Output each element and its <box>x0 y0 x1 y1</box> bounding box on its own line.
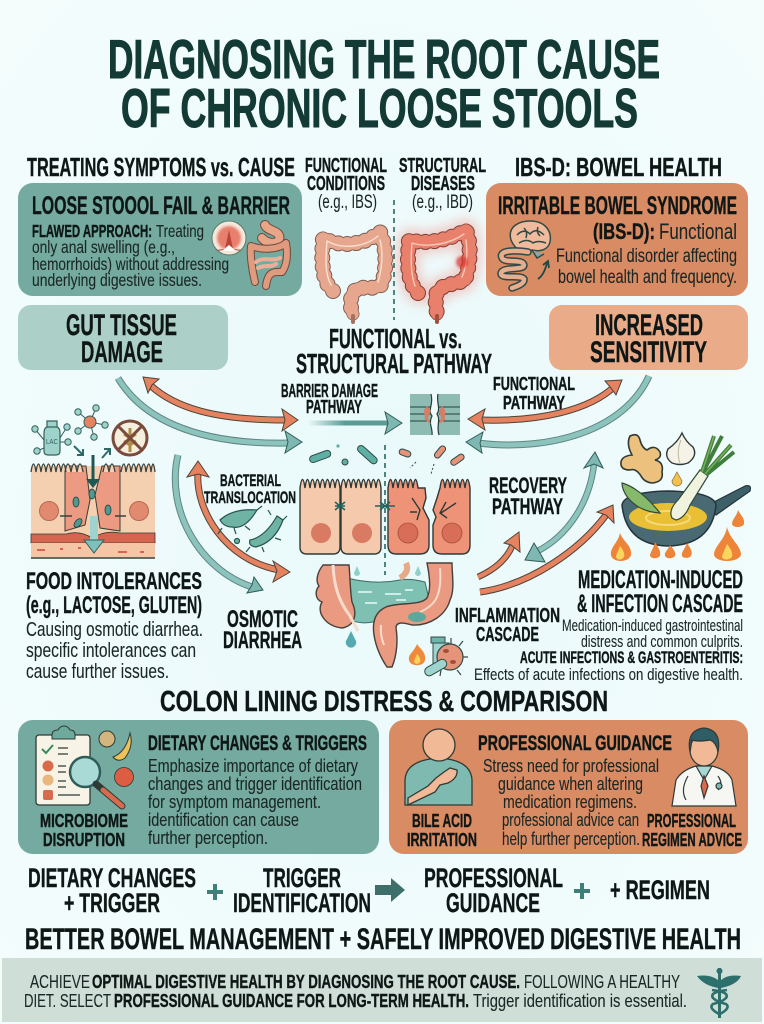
panel: dietary changes and triggers: DIETARY CHANGES & TRIGGERS <box>148 732 367 755</box>
label: bacterial translocation: TRANSLOCATION <box>204 488 296 507</box>
icon: food intolerance molecules: LAC <box>46 439 58 446</box>
panel: dietary changes and triggers: for symptom management. <box>148 791 321 812</box>
healthy cells <box>300 480 381 554</box>
footer band <box>2 958 762 1022</box>
panel: loose stool fail and barrier <box>18 183 302 296</box>
heading: functional vs structural pathway <box>296 323 492 379</box>
arrow: recovery teal double <box>525 452 603 562</box>
arrow: upper right orange <box>468 380 622 430</box>
panel: professional guidance: BILE ACID <box>412 811 472 831</box>
text: food intolerances <box>26 568 203 683</box>
icon: pan with oil and scallion <box>622 436 750 546</box>
label: recovery pathway <box>489 473 567 519</box>
icon: plus <box>207 884 223 900</box>
panel: irritable bowel syndrome: (IBS-D): <box>593 219 655 244</box>
panel: professional guidance <box>389 720 748 854</box>
panel: dietary changes and triggers <box>18 720 379 854</box>
panel: structural diseases <box>399 155 486 322</box>
text: medication-induced and infection cascade <box>474 566 743 684</box>
panel: dietary changes and triggers: changes and trigger identification <box>148 773 362 794</box>
footer band: DIET. SELECT <box>24 991 111 1011</box>
label: barrier damage pathway: PATHWAY <box>306 397 362 417</box>
icon: caduceus <box>697 968 741 1018</box>
panel: professional guidance: PROFESSIONAL GUIDANCE <box>478 732 672 755</box>
panel: dietary changes and triggers: identification can cause <box>148 809 299 830</box>
label: functional pathway: PATHWAY <box>503 393 565 413</box>
text: food intolerances: cause further issues. <box>26 661 169 683</box>
label: inflammation cascade: CASCADE <box>476 624 539 646</box>
icon: flames <box>611 510 744 561</box>
label: bacterial translocation <box>204 471 296 507</box>
arrow: equation <box>375 878 405 902</box>
heading: colon lining distress: COLON LINING DISTRESS & COMPARISON <box>160 686 608 718</box>
arrow: upper left orange <box>143 377 298 431</box>
panel: dietary changes and triggers: DISRUPTION <box>43 830 125 850</box>
equation: professional guidance: PROFESSIONAL <box>424 863 563 893</box>
panel: professional guidance: Stress need for professional <box>483 755 659 776</box>
footer band: PROFESSIONAL GUIDANCE FOR LONG-TERM HEALTH. <box>114 991 469 1011</box>
label: barrier damage pathway: BARRIER DAMAGE <box>281 381 378 401</box>
panel: irritable bowel syndrome: Functional <box>659 219 737 244</box>
icon: food intolerance molecules <box>32 405 147 458</box>
label: osmotic diarrhea <box>223 606 302 654</box>
panel: structural diseases: STRUCTURAL <box>399 155 486 177</box>
label: functional pathway: FUNCTIONAL <box>493 374 575 394</box>
footer band: OPTIMAL DIGESTIVE HEALTH BY DIAGNOSING THE ROOT CAUSE. <box>92 972 520 992</box>
label: barrier damage pathway <box>281 381 378 417</box>
panel: professional guidance: help further perception. <box>502 828 640 849</box>
equation: professional guidance: GUIDANCE <box>446 888 540 918</box>
diagram: damaged villi tissue <box>31 455 155 558</box>
panel: loose stool fail and barrier: only anal swelling (e.g., <box>32 237 175 257</box>
icon: digestive tract <box>251 225 287 286</box>
icon: flame and pathogen <box>409 637 468 677</box>
footer band: Trigger identification is essential. <box>473 991 687 1011</box>
text: food intolerances: (e.g., LACTOSE, GLUTEN) <box>26 592 202 619</box>
arrow: recovery short orange <box>478 532 520 577</box>
label: bacterial translocation: BACTERIAL <box>220 471 281 490</box>
equation: trigger identification: IDENTIFICATION <box>233 888 371 918</box>
arrow: lower left teal <box>175 455 263 593</box>
icon: anal swelling <box>212 221 246 255</box>
panel: structural diseases: (e.g., IBD) <box>412 192 473 213</box>
text: food intolerances: FOOD INTOLERANCES <box>26 568 202 595</box>
box: increased sensitivity <box>549 305 748 370</box>
damaged cells <box>388 480 470 554</box>
dashed divider top <box>393 200 395 320</box>
panel: functional conditions: CONDITIONS <box>307 173 385 195</box>
panel: loose stool fail and barrier: underlying digestive issues. <box>32 270 202 290</box>
icon: inflamed colon <box>408 230 470 322</box>
label: functional pathway <box>493 374 575 413</box>
text: food intolerances: Causing osmotic diarrhea. <box>26 619 203 641</box>
equation: trigger identification: TRIGGER <box>263 863 341 893</box>
panel: dietary changes and triggers: MICROBIOME <box>40 811 128 831</box>
panel: professional guidance: IRRITATION <box>407 830 477 850</box>
panel: functional conditions: (e.g., IBS) <box>318 192 377 213</box>
panel: structural diseases: DISEASES <box>411 173 475 195</box>
arrow: inflammation long orange <box>480 505 614 592</box>
arrow: upper right teal <box>466 376 649 453</box>
label: recovery pathway: RECOVERY <box>489 473 567 498</box>
panel: functional conditions: FUNCTIONAL <box>305 155 387 177</box>
panel: functional conditions <box>305 155 387 322</box>
icon: ginger <box>621 435 662 483</box>
box: gut tissue damage <box>18 305 228 370</box>
equation: trigger identification <box>233 863 371 918</box>
box: gut tissue damage: DAMAGE <box>81 336 163 369</box>
panel: loose stool fail and barrier: Treating <box>156 221 204 241</box>
arrow: upper left teal <box>118 378 302 453</box>
panel: dietary changes and triggers: further perception. <box>148 827 268 848</box>
icon: functional colon <box>322 232 385 322</box>
dashed divider center <box>384 445 386 575</box>
icon: clipboard and magnifier <box>36 726 134 806</box>
panel: professional guidance: medication regimens. <box>503 791 637 812</box>
panel: irritable bowel syndrome <box>486 183 748 296</box>
label: inflammation cascade: INFLAMMATION <box>455 605 560 627</box>
footer band: ACHIEVE <box>30 972 90 992</box>
icon: bacteria <box>218 506 287 552</box>
panel: loose stool fail and barrier: hemorrhoids) without addressing <box>32 254 229 274</box>
icon: patient <box>405 729 472 805</box>
bacteria rods <box>309 444 465 474</box>
panel: loose stool fail and barrier: FLAWED APPROACH: <box>32 221 152 241</box>
heading: treating symptoms vs cause: TREATING SYMPTOMS vs. CAUSE <box>27 152 295 182</box>
panel: loose stool fail and barrier: LOOSE STOOOL FAIL & BARRIER <box>32 192 290 220</box>
label: osmotic diarrhea: OSMOTIC <box>227 606 298 633</box>
diagram: colon with fluid <box>316 563 453 667</box>
equation: regimen: + REGIMEN <box>610 875 710 905</box>
equation: dietary changes plus trigger: DIETARY CHANGES <box>28 863 196 893</box>
icon: plus second <box>574 883 590 899</box>
text: food intolerances: specific intolerances can <box>26 640 196 662</box>
equation: professional guidance <box>424 863 563 918</box>
equation: dietary changes plus trigger: + TRIGGER <box>64 888 160 918</box>
box: gut tissue damage: GUT TISSUE <box>66 309 177 342</box>
icon: damaged tight junction <box>410 394 460 435</box>
footer band: FOLLOWING A HEALTHY <box>524 972 680 992</box>
diagram: epithelial cells <box>300 444 470 554</box>
heading: functional vs structural pathway: STRUCTURAL PATHWAY <box>296 348 492 379</box>
label: inflammation cascade <box>455 605 560 646</box>
icon: doctor <box>672 728 736 806</box>
panel: dietary changes and triggers: Emphasize importance of dietary <box>148 755 359 776</box>
panel: professional guidance: guidance when altering <box>498 773 643 794</box>
label: recovery pathway: PATHWAY <box>492 494 563 519</box>
icon: brain and gut <box>501 221 550 288</box>
label: osmotic diarrhea: DIARRHEA <box>223 627 302 654</box>
arrow: barrier damage <box>308 412 402 434</box>
arrow: lower left orange <box>187 461 290 582</box>
icon: garlic <box>667 433 695 486</box>
equation: dietary changes plus trigger <box>28 863 196 918</box>
title <box>108 28 660 139</box>
heading: functional vs structural pathway: FUNCTIONAL vs. <box>329 323 462 354</box>
panel: professional guidance: professional advice can <box>502 809 639 830</box>
